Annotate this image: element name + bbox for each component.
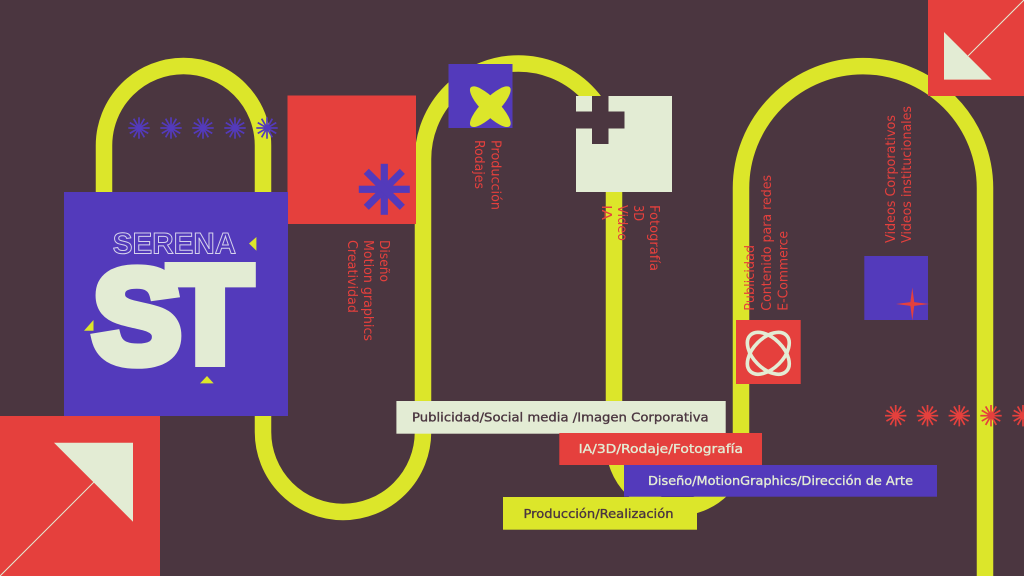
icon: corner triangle: [54, 443, 133, 522]
text: advertising services: E-Commerce: [777, 231, 792, 311]
text: design services: Creatividad: [344, 240, 359, 313]
arrow line: [968, 0, 1024, 56]
text: design services: Motion graphics: [360, 240, 375, 341]
icon: corner triangle: [944, 32, 992, 80]
purple star row: [128, 117, 278, 139]
label: production: Producción/Realización: [524, 506, 674, 521]
label: technology: [559, 433, 762, 465]
text: photography services: 3D: [630, 205, 645, 221]
panel: corporate video square: [864, 256, 929, 320]
red star row: [885, 405, 1024, 426]
winding lime path: [104, 64, 985, 576]
label: design: Diseño/MotionGraphics/Dirección de Arte: [648, 473, 913, 488]
logo monogram: S: [93, 243, 181, 390]
icon: lime petals: [465, 81, 516, 132]
label: design: [624, 465, 937, 497]
text: photography services: Fotografía: [646, 205, 661, 271]
text: advertising services: Contenido para redes: [760, 175, 775, 311]
panel: design red square: [288, 96, 416, 224]
text: design services: [344, 240, 391, 341]
text: corporate video services: Videos institucionales: [900, 106, 915, 243]
icon: purple asterisk: [359, 164, 410, 215]
panel: bottom left corner: [0, 416, 160, 576]
logo outline word: SERENA: [113, 227, 236, 260]
label: advertising: Publicidad/Social media /Imagen Corporativa: [412, 409, 709, 424]
accent triangles: [84, 237, 256, 383]
text: corporate video services: [884, 106, 915, 243]
text: production services: Rodajes: [471, 140, 486, 189]
panel: production square: [448, 64, 516, 132]
panel: logo: [64, 192, 288, 416]
arrow line: [0, 482, 94, 576]
text: production services: [471, 140, 502, 210]
text: corporate video services: Videos Corporativos: [884, 115, 899, 243]
icon: four point sparkle: [896, 288, 929, 320]
text: production services: Producción: [487, 140, 502, 210]
panel: advertising square: [736, 320, 801, 384]
label: advertising: [396, 401, 726, 434]
label: production: [503, 497, 697, 530]
text: photography services: [598, 205, 661, 271]
panel: top right corner: [928, 0, 1024, 96]
panel: photography square: [576, 96, 672, 192]
icon: plus cut-out: [576, 96, 624, 144]
icon: orbit: [740, 325, 797, 382]
text: advertising services: Publicidad: [743, 245, 758, 311]
text: design services: Diseño: [376, 240, 391, 282]
logo monogram: T: [168, 238, 252, 392]
text: photography services: IA: [598, 205, 613, 220]
label: technology: IA/3D/Rodaje/Fotografía: [579, 441, 743, 456]
text: photography services: Video: [614, 205, 629, 241]
text: advertising services: [743, 175, 792, 311]
